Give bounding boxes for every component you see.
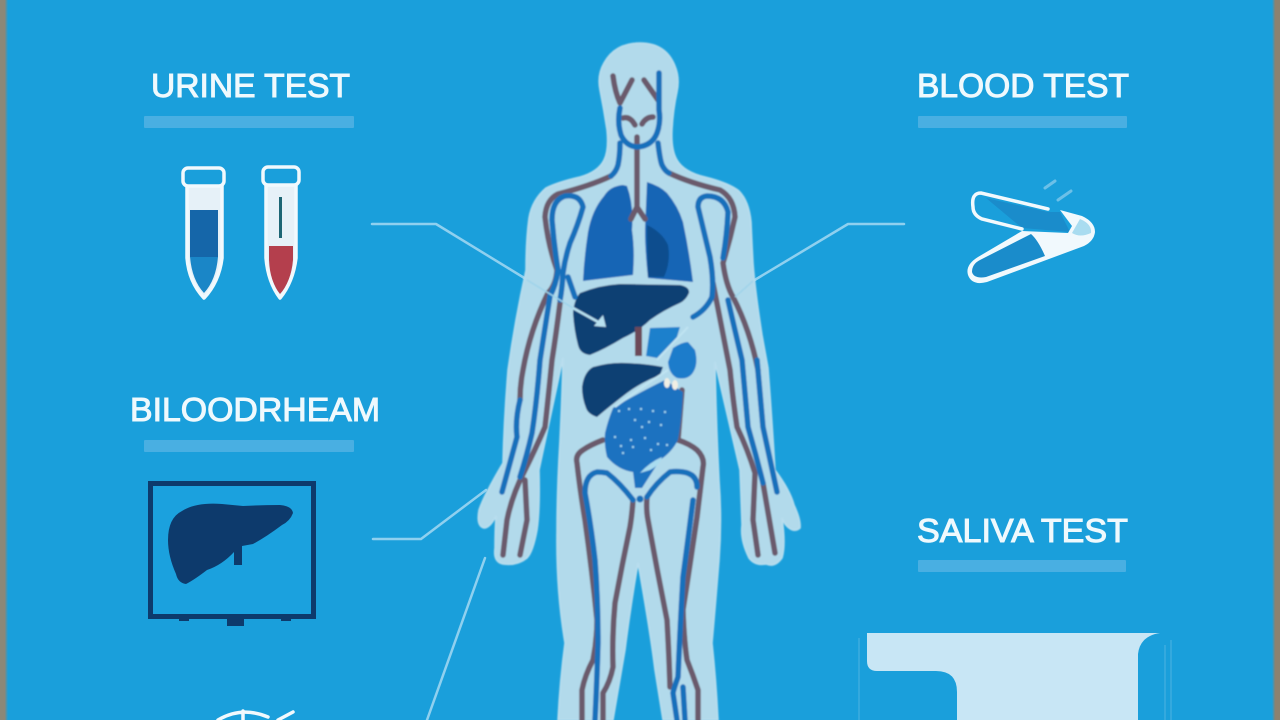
organ: pancreas	[646, 327, 680, 358]
icon: red test tube	[263, 167, 299, 298]
body silhouette	[478, 43, 800, 720]
trachea	[631, 137, 645, 219]
organ: upper liver	[573, 284, 689, 355]
panel: saliva test	[859, 512, 1171, 720]
icon: blue test tube	[183, 168, 224, 298]
organ: stomach	[668, 342, 696, 378]
human body figure	[478, 43, 800, 720]
icon: blood test capsules	[967, 181, 1095, 283]
connector: urine test	[372, 224, 526, 279]
panel: blood test	[917, 67, 1129, 283]
arteries: brown vessels	[503, 76, 775, 720]
heading: saliva test: SALIVA TEST	[917, 512, 1128, 549]
connector: lower left	[427, 558, 485, 720]
organ: lungs	[583, 182, 693, 282]
panel: urine test	[144, 67, 354, 298]
heading underline: bloodstream	[144, 440, 354, 452]
organ: lower liver	[582, 363, 663, 417]
icon: liver on monitor	[150, 484, 314, 626]
connector continuation with arrow into liver	[527, 280, 753, 407]
heading underline: saliva test	[918, 560, 1126, 572]
veins: blue vessels	[502, 73, 777, 720]
heading: bloodstream: BILOODRHEAM	[130, 391, 380, 428]
heading: urine test: URINE TEST	[151, 67, 350, 104]
icon: saliva collector	[859, 633, 1171, 720]
connector: blood test	[753, 224, 904, 281]
organ: intestines	[605, 378, 683, 502]
heading underline: blood test	[918, 116, 1127, 128]
heading: blood test: BLOOD TEST	[917, 67, 1129, 104]
heading underline: urine test	[144, 116, 354, 128]
organ: stem vessel	[635, 327, 642, 356]
connector: bloodstream	[373, 490, 486, 539]
panel: bloodstream	[130, 391, 380, 626]
icon: partial wheel at bottom edge	[218, 711, 293, 720]
